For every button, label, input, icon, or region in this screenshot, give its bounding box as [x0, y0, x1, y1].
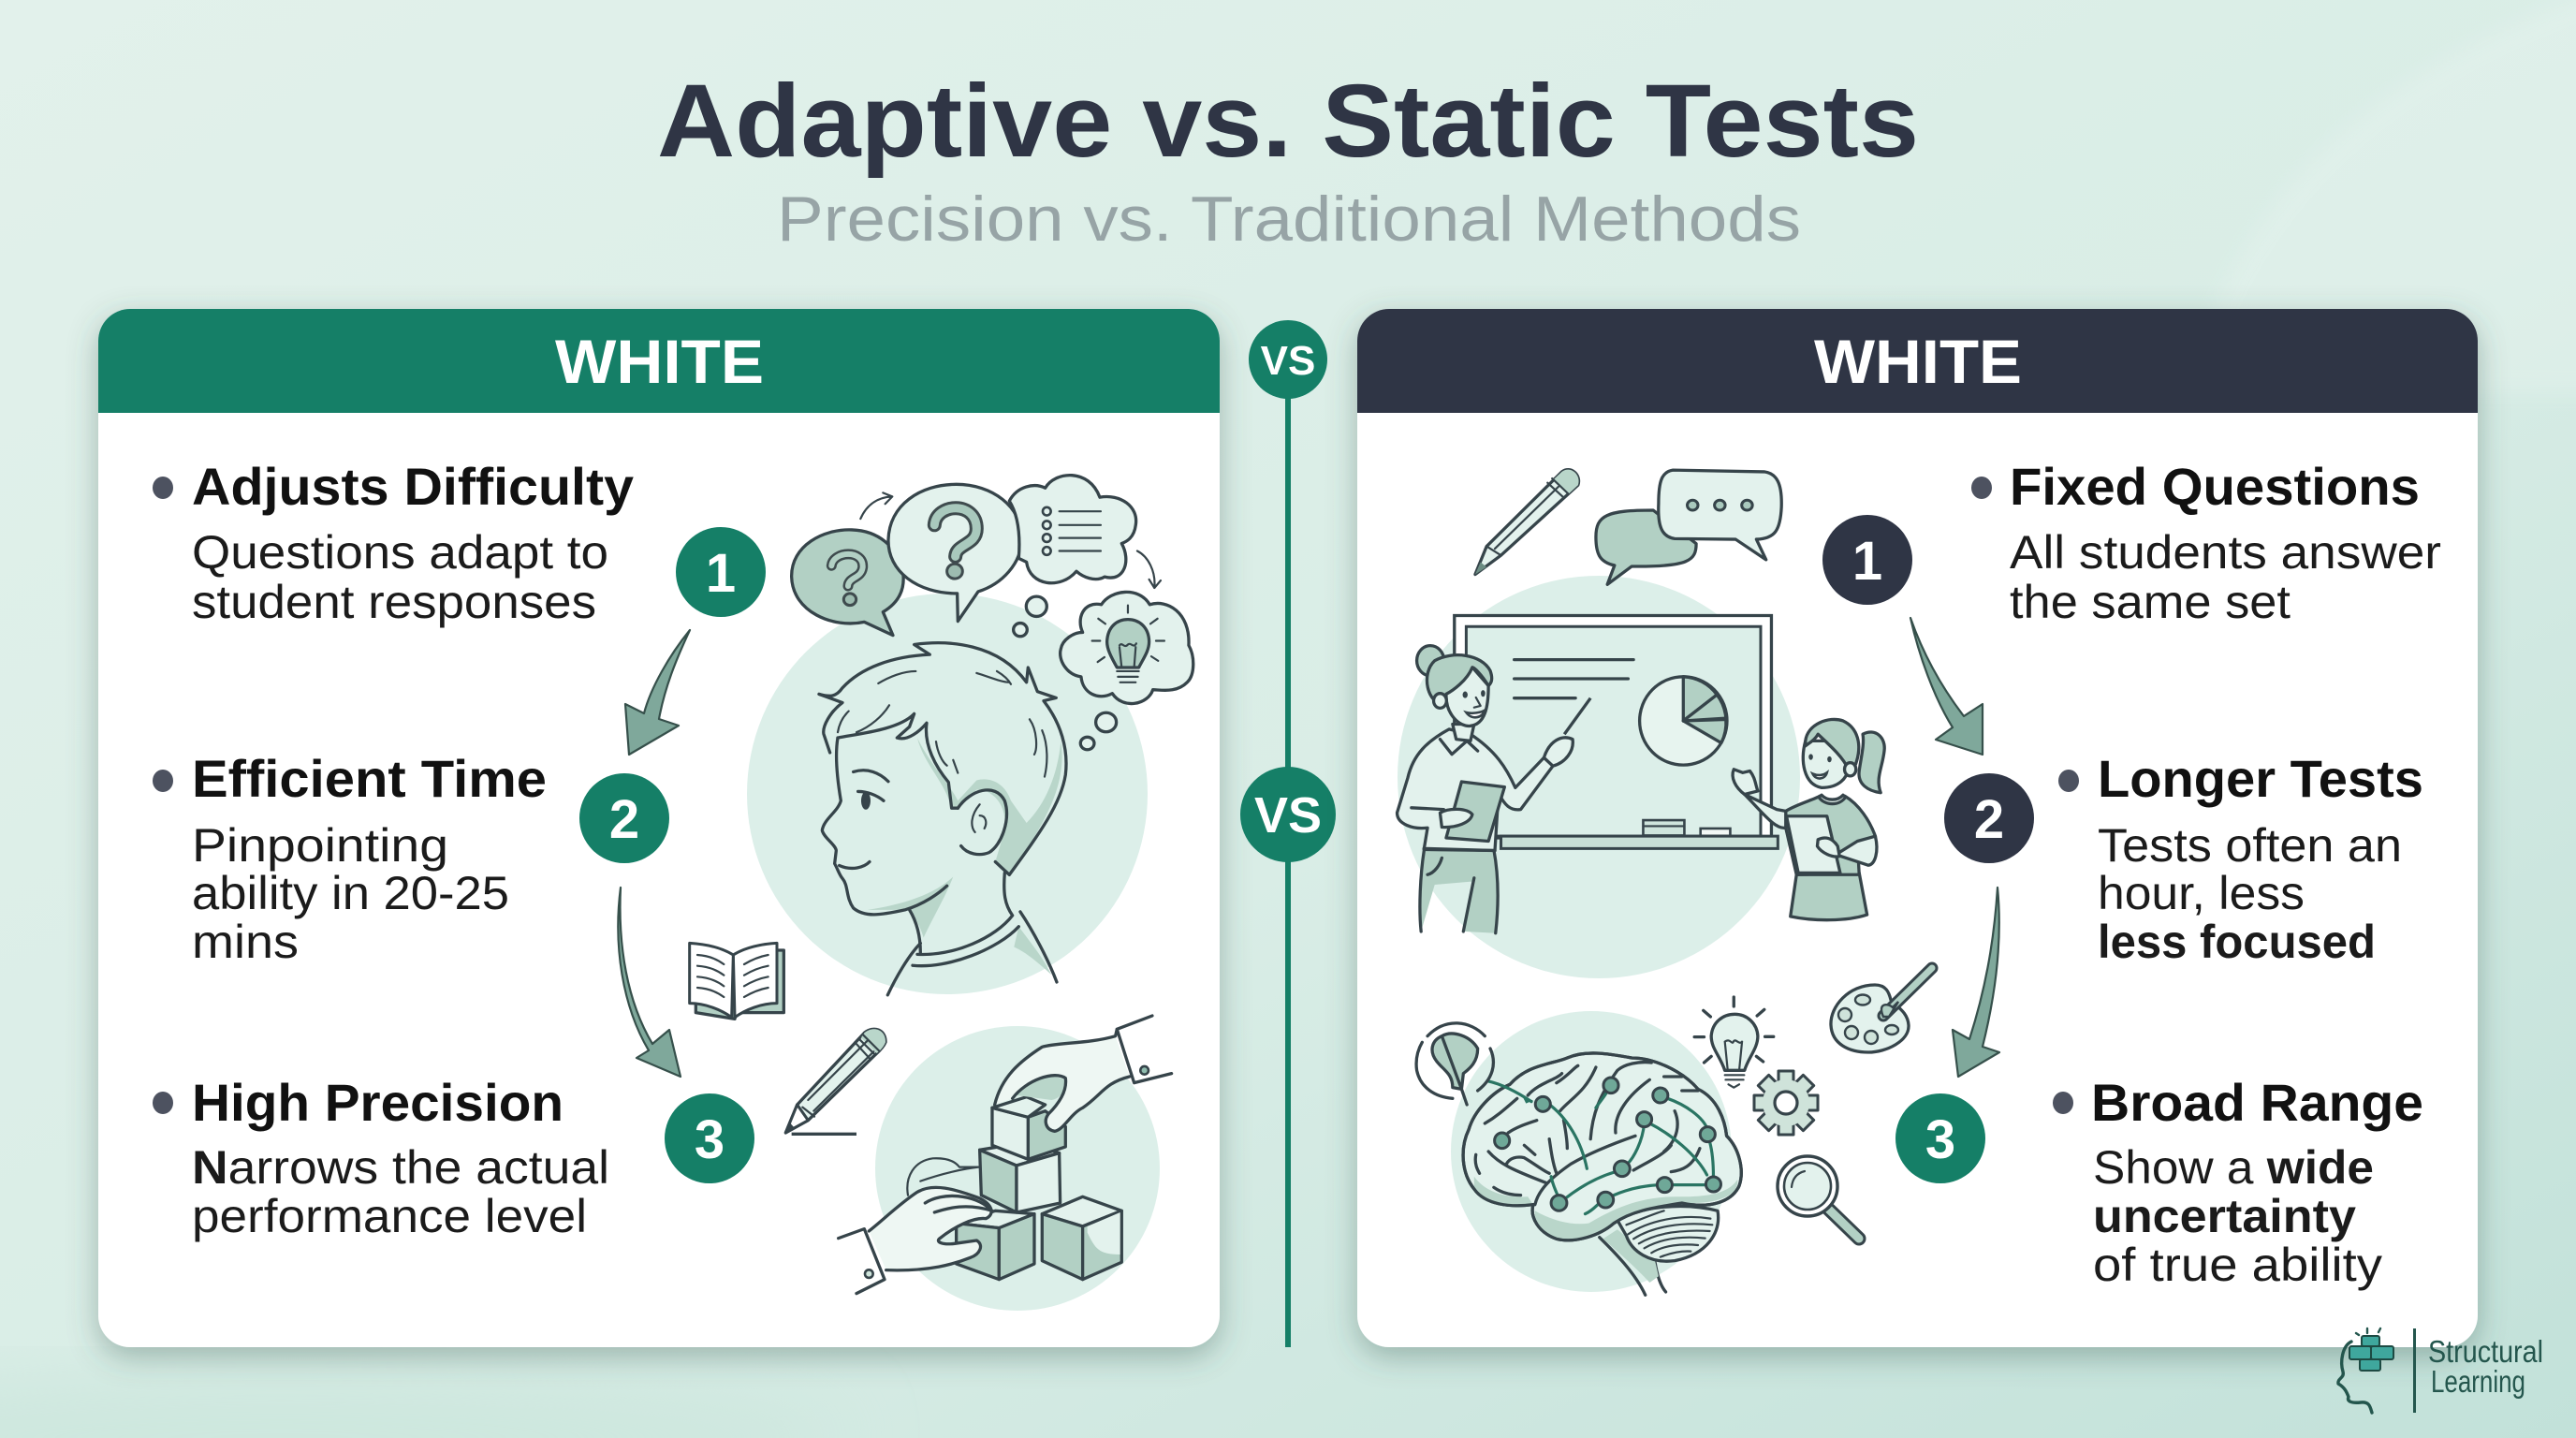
block: lower left — [957, 1211, 1034, 1280]
brain stem — [1600, 1238, 1666, 1295]
point: efficient time — [153, 749, 547, 968]
illustration: teacher and student at board — [1398, 470, 1884, 978]
point: efficient time: mins — [192, 916, 299, 968]
logo head profile — [2338, 1342, 2372, 1413]
panel: static tests — [1357, 309, 2478, 1347]
step badge 3 — [1895, 1093, 1985, 1183]
small VS badge: VS — [1261, 338, 1315, 384]
point: adjusts difficulty — [153, 457, 634, 628]
cerebellum — [1617, 1206, 1719, 1261]
point: high precision: Narrows the actual — [192, 1141, 609, 1194]
illustration: open book — [690, 943, 783, 1019]
pie chart — [1640, 677, 1727, 765]
illustration: building blocks — [839, 1016, 1172, 1311]
point: longer tests — [2058, 749, 2423, 968]
logo: Structural Learning — [2338, 1328, 2543, 1413]
step badge 2: 2 — [1974, 789, 2004, 850]
step badge 2 — [1944, 773, 2034, 863]
point: fixed questions — [1971, 457, 2441, 628]
network nodes — [1495, 1078, 1720, 1211]
arrow 2 to 3 — [1953, 888, 1999, 1077]
left panel header — [98, 309, 1220, 413]
gear icon — [1754, 1071, 1818, 1135]
point: high precision: High Precision — [192, 1073, 564, 1132]
point: adjusts difficulty: student responses — [192, 576, 596, 628]
upper hand — [995, 1016, 1172, 1131]
subtitle: Precision vs. Traditional Methods — [777, 183, 1801, 255]
illustration: boy thinking — [747, 476, 1193, 995]
point: fixed questions: All students answer — [2010, 526, 2441, 579]
logo: Structural Learning: Learning — [2431, 1364, 2525, 1399]
point: high precision — [153, 1073, 609, 1242]
lower hand — [839, 1158, 992, 1294]
small speech bubble with question mark — [792, 530, 903, 636]
paint palette icon — [1831, 968, 1932, 1052]
step badge 1 — [1822, 515, 1912, 605]
point: longer tests: Longer Tests — [2098, 749, 2423, 808]
large VS badge — [1240, 767, 1336, 862]
step badge 3: 3 — [695, 1109, 724, 1170]
small VS badge — [1249, 320, 1327, 399]
point: longer tests: less focused — [2098, 916, 2376, 968]
network links — [1488, 1081, 1713, 1214]
light bulb icon — [1694, 997, 1774, 1088]
left header label: WHITE — [555, 327, 764, 396]
right panel header — [1357, 309, 2478, 413]
block: middle — [980, 1142, 1061, 1212]
small brain icon — [1416, 1023, 1493, 1105]
point: adjusts difficulty: Questions adapt to — [192, 526, 608, 579]
block: lower right — [1042, 1196, 1121, 1280]
arrow 1 to 2 — [625, 630, 690, 755]
point: broad range: Show a wide — [2093, 1141, 2374, 1194]
chat bubbles — [1596, 470, 1781, 584]
large speech bubble with question mark — [888, 484, 1022, 622]
pencil — [1475, 470, 1579, 575]
step badge 1: 1 — [1852, 531, 1882, 592]
point: fixed questions: Fixed Questions — [2010, 457, 2420, 516]
large VS badge: VS — [1254, 787, 1322, 844]
step badge 2: 2 — [609, 789, 639, 850]
illustration: pencil — [785, 1029, 886, 1134]
logo blocks icon — [2349, 1328, 2393, 1371]
point: longer tests: hour, less — [2098, 867, 2305, 919]
point: efficient time: ability in 20-25 — [192, 867, 509, 919]
step badge 3 — [665, 1093, 754, 1183]
point: efficient time: Pinpointing — [192, 819, 448, 872]
point: longer tests: Tests often an — [2098, 819, 2402, 872]
brain folds — [1475, 1063, 1700, 1205]
point: broad range: of true ability — [2093, 1239, 2382, 1291]
logo wordmark: Structural — [2428, 1334, 2543, 1369]
step badge 1 — [676, 527, 766, 617]
point: high precision: performance level — [192, 1190, 587, 1242]
step badge 2 — [579, 773, 669, 863]
cerebrum — [1463, 1053, 1741, 1240]
point: adjusts difficulty: Adjusts Difficulty — [192, 457, 634, 516]
step badge 1: 1 — [706, 543, 736, 604]
flow arrows — [860, 492, 1161, 588]
point: efficient time: Efficient Time — [192, 749, 547, 808]
arrow 2 to 3 — [618, 888, 681, 1077]
panel: adaptive tests — [98, 309, 1220, 1347]
point: broad range — [2053, 1073, 2423, 1291]
center divider line — [1285, 360, 1291, 1347]
cloud with list — [1009, 476, 1136, 583]
point: broad range: uncertainty — [2093, 1190, 2356, 1242]
magnifying glass icon — [1778, 1156, 1859, 1239]
right header label: WHITE — [1814, 327, 2022, 396]
point: broad range: Broad Range — [2091, 1073, 2423, 1132]
title: Adaptive vs. Static Tests — [657, 64, 1919, 179]
whiteboard — [1455, 615, 1778, 848]
illustration: brain network — [1416, 968, 1932, 1295]
block: top — [992, 1097, 1065, 1159]
teacher — [1398, 646, 1573, 933]
cloud with light bulb — [1061, 592, 1193, 704]
arrow 1 to 2 — [1910, 618, 1983, 755]
point: fixed questions: the same set — [2010, 576, 2291, 628]
student — [1733, 719, 1884, 920]
step badge 3: 3 — [1925, 1109, 1955, 1170]
